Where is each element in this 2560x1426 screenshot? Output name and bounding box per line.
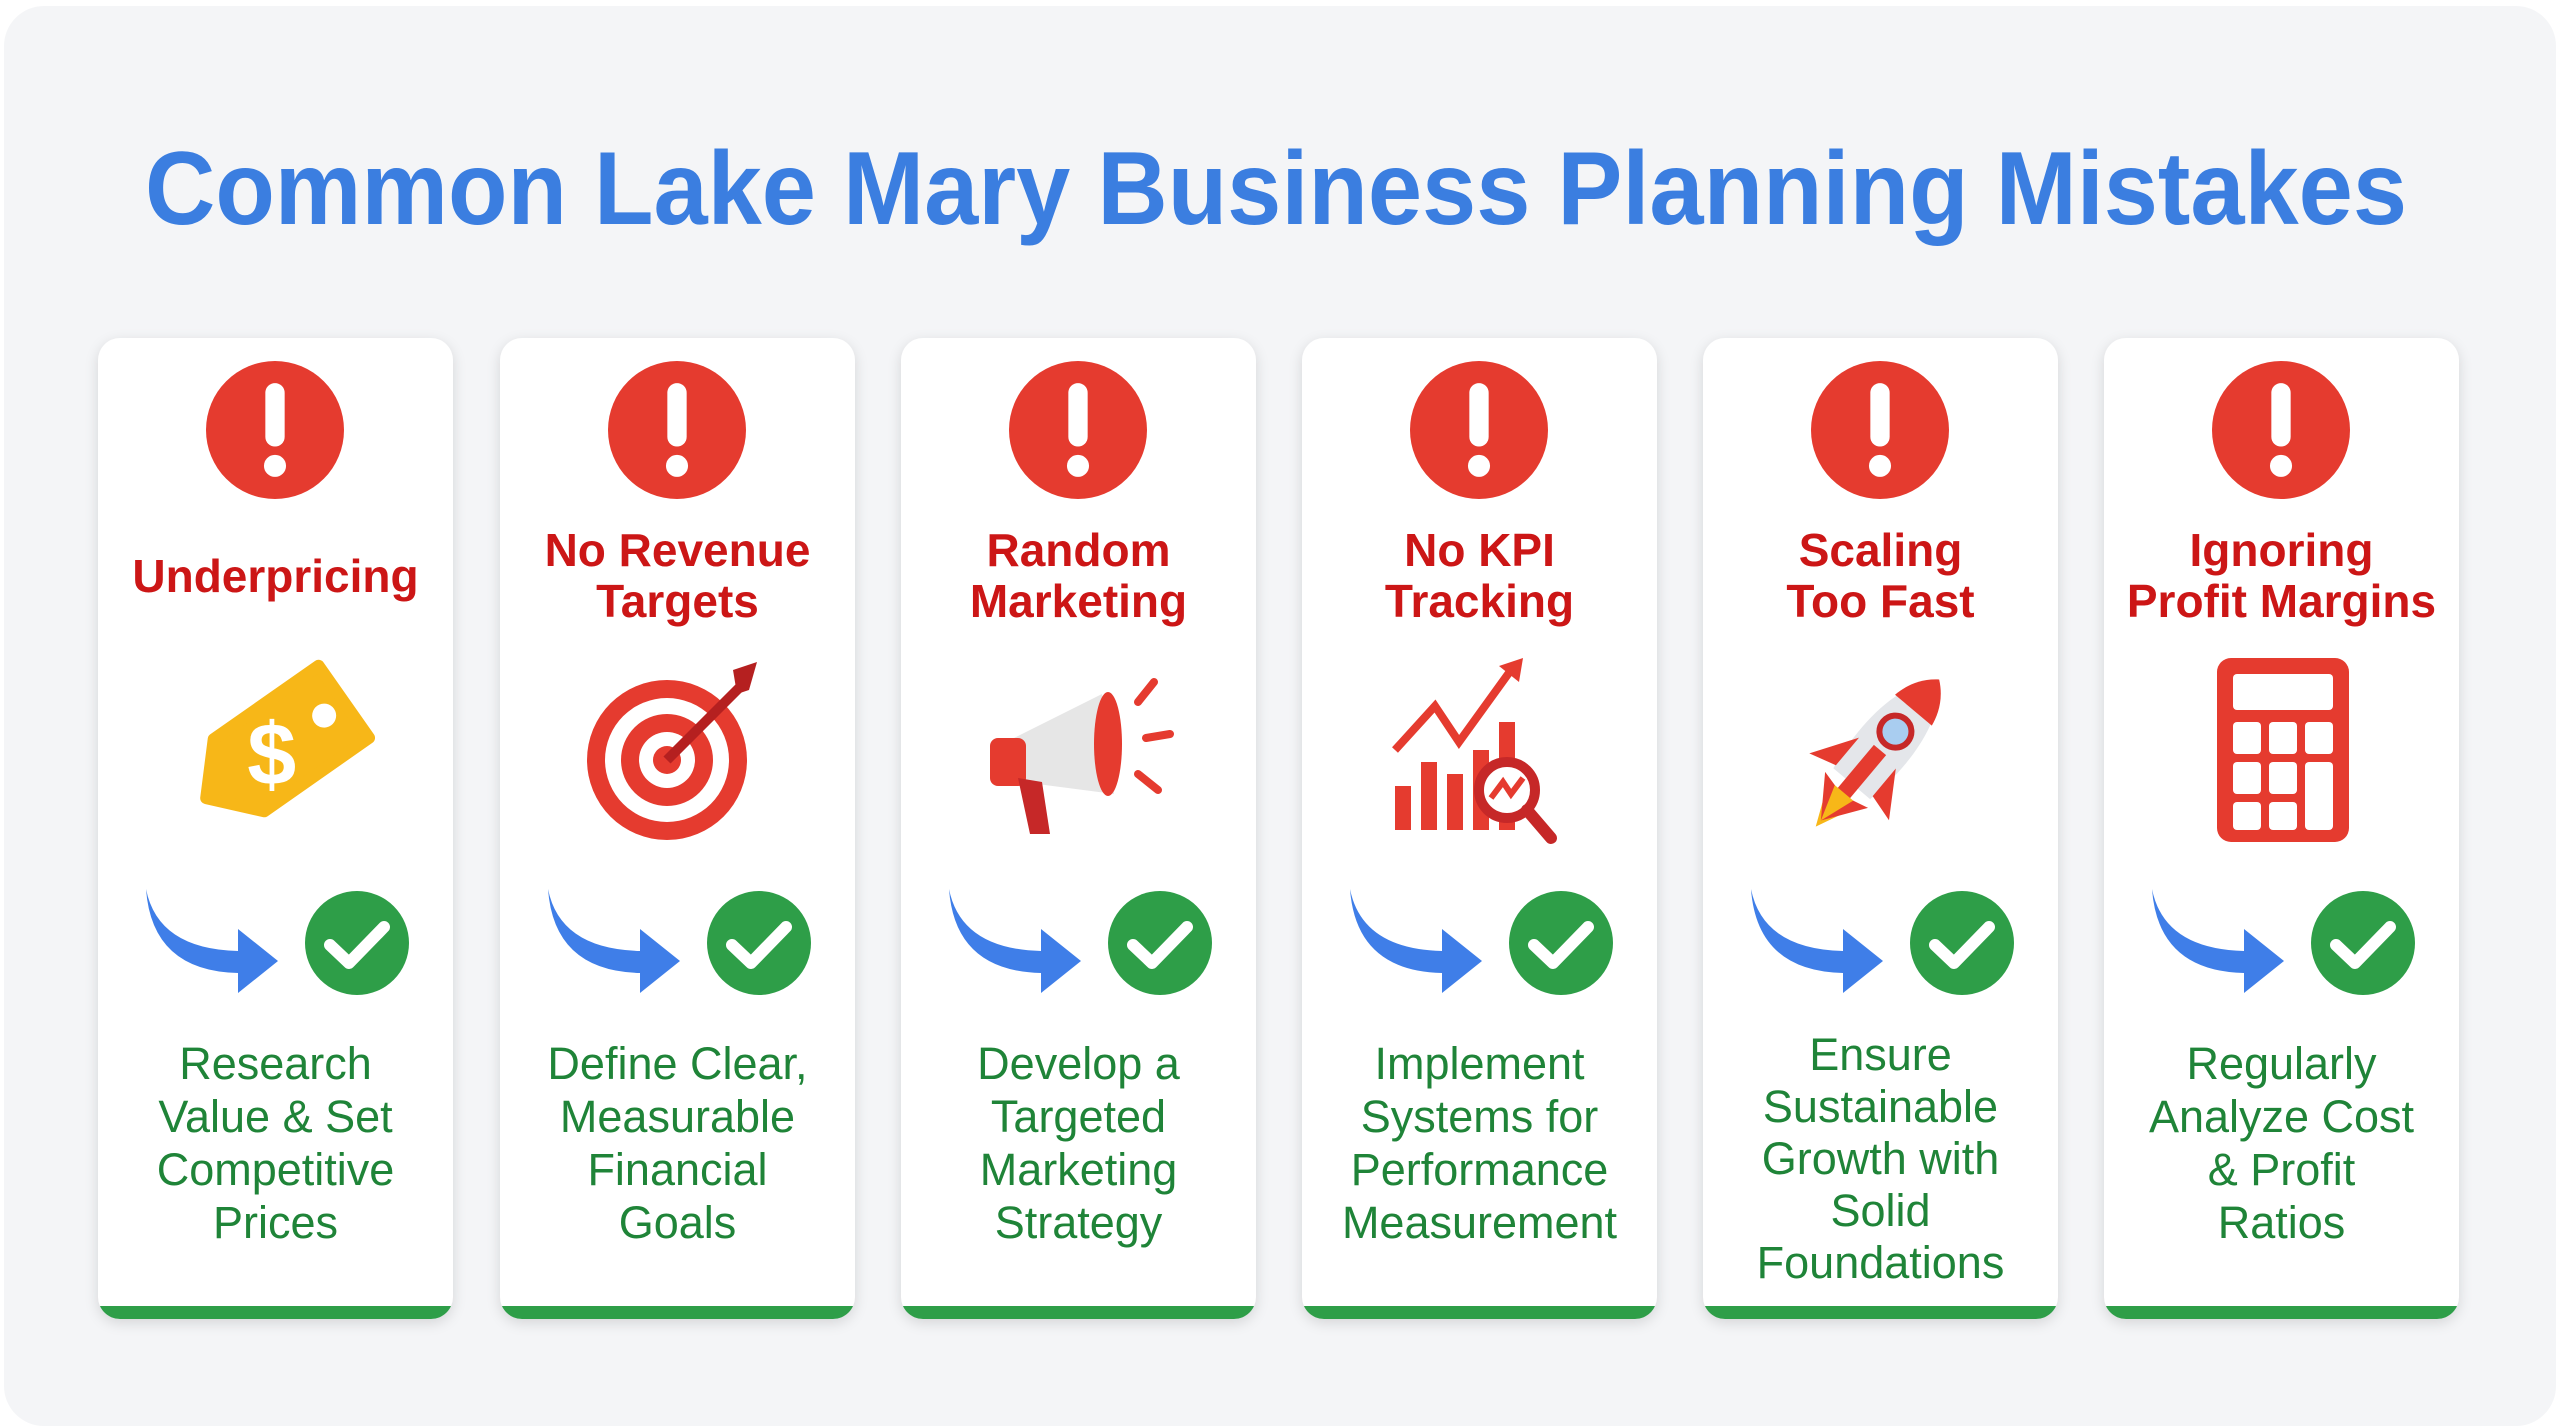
heading — [545, 524, 810, 627]
solution text: Analyze Cost — [2149, 1091, 2414, 1142]
solution text: Value & Set — [158, 1091, 393, 1142]
solution text: Growth with — [1762, 1133, 1999, 1184]
heading — [2127, 524, 2436, 627]
heading: Random — [986, 524, 1170, 576]
heading: Tracking — [1385, 575, 1574, 627]
solution text: Ensure — [1809, 1029, 1952, 1080]
icon: price tag: $ — [247, 704, 296, 803]
icon: target — [587, 662, 757, 840]
solution text: Prices — [213, 1197, 338, 1248]
solution text — [2149, 1038, 2414, 1248]
solution text: Targeted — [991, 1091, 1166, 1142]
solution text: Performance — [1351, 1144, 1608, 1195]
heading — [1385, 524, 1574, 627]
heading: Profit Margins — [2127, 575, 2436, 627]
panel: Scaling Too Fast — [1703, 338, 2058, 1319]
panel: Random Marketing — [901, 338, 1256, 1319]
panel: Underpricing — [98, 338, 453, 1319]
heading: Ignoring — [2190, 524, 2373, 576]
solution text: Research — [179, 1038, 372, 1089]
heading: No Revenue — [545, 524, 810, 576]
solution text: Sustainable — [1763, 1081, 1998, 1132]
arrow and check — [2152, 889, 2415, 995]
solution text — [1757, 1029, 2004, 1288]
icon: rocket — [1809, 679, 1941, 827]
heading: Targets — [596, 575, 759, 627]
solution text: Measurement — [1342, 1197, 1617, 1248]
solution text: Goals — [619, 1197, 736, 1248]
solution text: Strategy — [995, 1197, 1162, 1248]
solution text: Regularly — [2186, 1038, 2377, 1089]
solution text: Marketing — [980, 1144, 1177, 1195]
icon: warning — [608, 361, 746, 499]
heading: No KPI — [1404, 524, 1555, 576]
solution text: Financial — [587, 1144, 768, 1195]
arrow and check — [949, 889, 1212, 995]
solution text: Define Clear, — [547, 1038, 808, 1089]
icon: price tag — [200, 660, 375, 818]
heading — [1786, 524, 1975, 627]
icon: warning — [1410, 361, 1548, 499]
solution text: Foundations — [1757, 1237, 2004, 1288]
solution text: Solid — [1830, 1185, 1931, 1236]
solution text: Ratios — [2218, 1197, 2345, 1248]
heading: Scaling — [1799, 524, 1962, 576]
heading: Underpricing — [132, 550, 419, 602]
panel: No Revenue Targets — [500, 338, 855, 1319]
arrow and check — [1751, 889, 2014, 995]
solution text: Systems for — [1361, 1091, 1598, 1142]
icon: warning — [206, 361, 344, 499]
solution text: Develop a — [977, 1038, 1180, 1089]
arrow and check — [1350, 889, 1613, 995]
icon: chart with magnifier — [1392, 658, 1557, 844]
icon: megaphone — [990, 678, 1174, 834]
icon: warning — [1009, 361, 1147, 499]
panel: Ignoring Profit Margins — [2104, 338, 2459, 1319]
heading: Too Fast — [1786, 575, 1975, 627]
heading: Marketing — [970, 575, 1187, 627]
icon: calculator — [2217, 658, 2349, 842]
solution text: Measurable — [560, 1091, 795, 1142]
solution text — [157, 1038, 394, 1248]
solution text: & Profit — [2208, 1144, 2355, 1195]
solution text — [547, 1038, 808, 1248]
heading — [970, 524, 1187, 627]
icon: warning — [2212, 361, 2350, 499]
solution text: Competitive — [157, 1144, 394, 1195]
panel: No KPI Tracking — [1302, 338, 1657, 1319]
solution text: Implement — [1374, 1038, 1585, 1089]
solution text — [977, 1038, 1180, 1248]
solution text — [1342, 1038, 1617, 1248]
arrow and check — [146, 889, 409, 995]
icon: warning — [1811, 361, 1949, 499]
arrow and check — [548, 889, 811, 995]
